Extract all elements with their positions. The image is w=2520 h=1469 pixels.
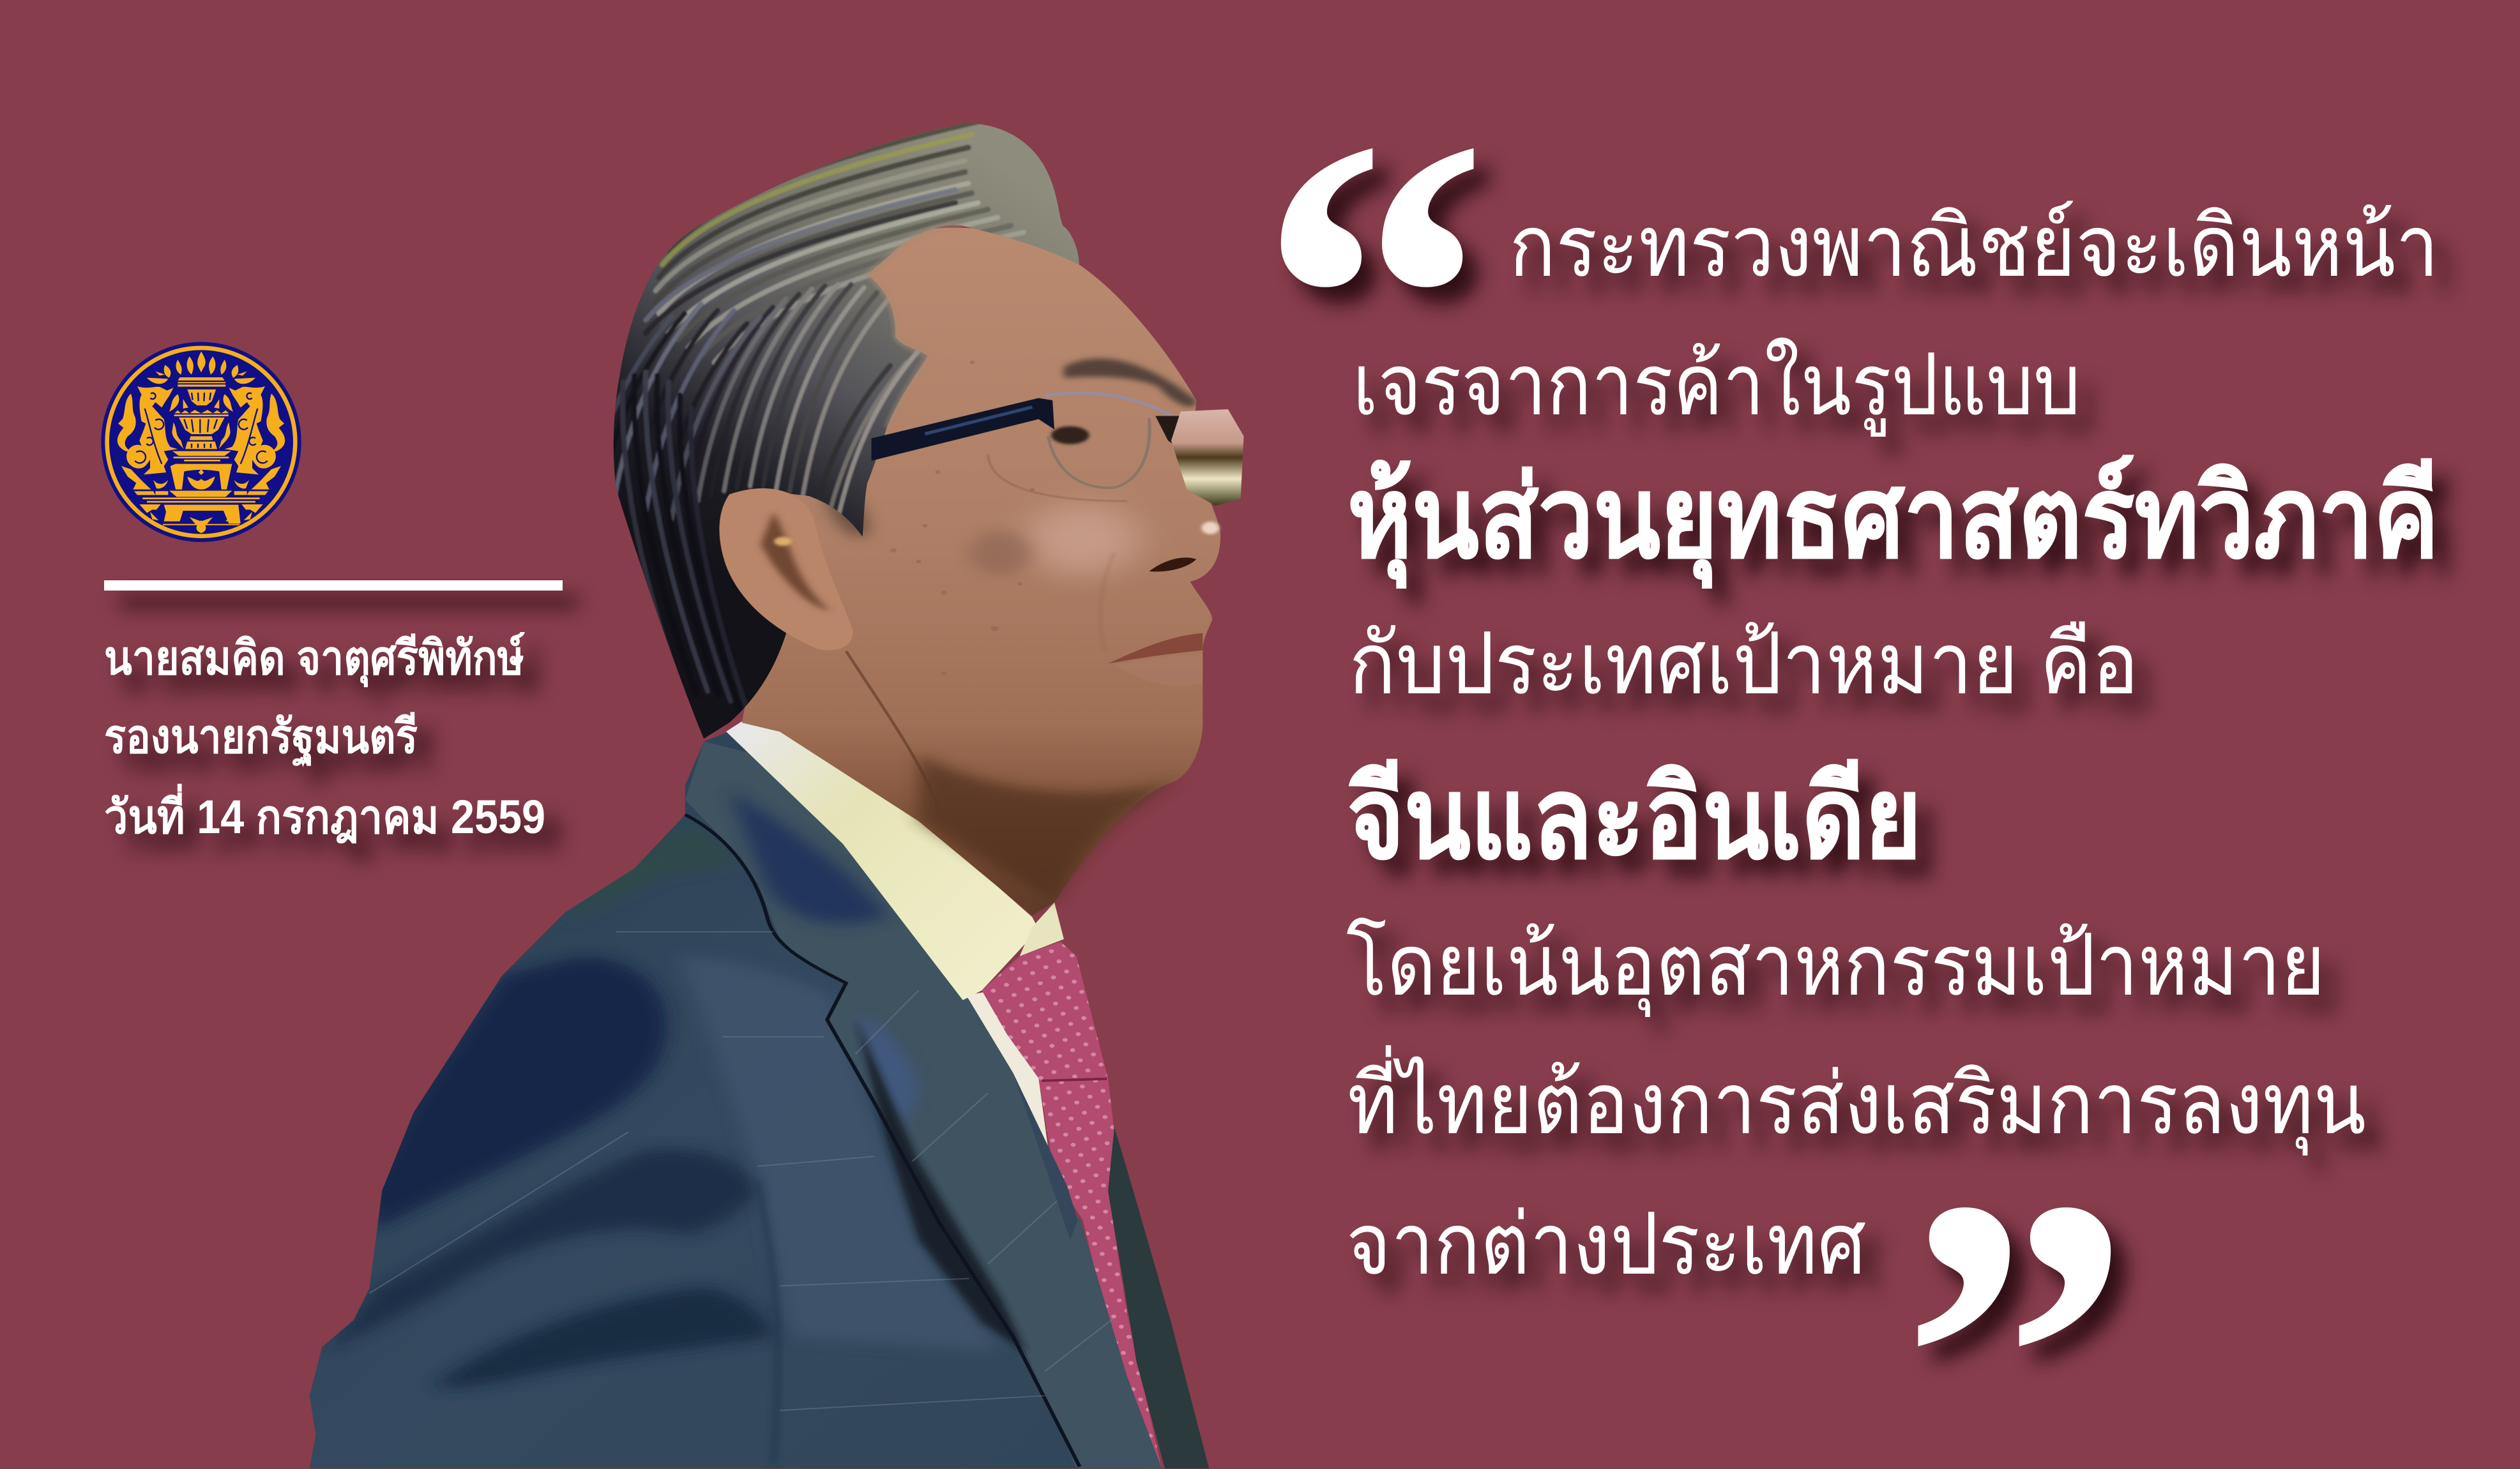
- opening quotation mark: “: [1259, 44, 1489, 554]
- emblem detailing: [135, 393, 268, 464]
- check pattern: [370, 932, 1114, 1410]
- base step: [134, 491, 155, 495]
- jacket and tie: [310, 719, 1209, 1468]
- skin speckles: [890, 361, 1035, 675]
- eye: [1051, 426, 1089, 444]
- lower ornament: [190, 517, 213, 525]
- shirt collar: [726, 719, 1038, 1000]
- shirt: [966, 990, 1067, 1200]
- ear and glasses: [719, 393, 1244, 650]
- date: วันที่ 14 กรกฎาคม 2559: [104, 783, 545, 843]
- lips: [1108, 633, 1203, 664]
- cheek shadow: [969, 530, 1032, 575]
- upper bowl: [187, 389, 216, 405]
- seal disc: [101, 342, 301, 542]
- soft hairline: [867, 225, 962, 428]
- glasses temple arm: [871, 398, 1054, 461]
- quote line 8: จากต่างประเทศ: [1346, 1197, 1866, 1292]
- top rim: [1045, 393, 1171, 416]
- quote line 7: ที่ไทยต้องการส่งเสริมการลงทุน: [1347, 1045, 2366, 1156]
- government seal: [101, 342, 301, 542]
- sleeve edge: [757, 1181, 778, 1464]
- bridge: [1155, 416, 1187, 454]
- middle bowl: [179, 418, 225, 434]
- lower table: [139, 504, 161, 513]
- nose highlight: [1201, 522, 1219, 534]
- jacket body: [310, 732, 1162, 1468]
- quote line 2: เจรจาการค้าในรูปแบบ: [1353, 338, 2081, 437]
- caption: speaker name and date: [104, 631, 545, 843]
- photo: man in profile: [310, 109, 1244, 1468]
- highlighted line: China and India: จีนและอินเดีย: [1347, 755, 1922, 882]
- quote line 1: กระทรวงพาณิชย์จะเดินหน้า: [1509, 199, 2439, 294]
- arm shadows: [363, 957, 667, 1230]
- head: [742, 228, 1220, 915]
- quote line 6: โดยเน้นอุตสาหกรรมเป้าหมาย: [1346, 917, 2325, 1017]
- quote block: [1259, 44, 2439, 1450]
- hair base: [614, 123, 1079, 739]
- flames: [147, 352, 255, 384]
- nostril: [1149, 557, 1196, 571]
- hair strands: [613, 123, 1027, 714]
- table ornament: [199, 469, 204, 475]
- jacket back panel: [1108, 1127, 1209, 1468]
- divider rule: [104, 580, 563, 591]
- speaker title: รองนายกรัฐมนตรี: [104, 710, 418, 767]
- quote line 4: กับประเทศเป้าหมาย คือ: [1349, 617, 2139, 712]
- lower bowl: [190, 436, 213, 440]
- glasses: [871, 393, 1244, 506]
- closing quotation mark: “: [1903, 941, 2133, 1450]
- hair: [584, 109, 1079, 739]
- lapel: [685, 741, 1162, 1468]
- tray: [172, 451, 231, 456]
- emblem: [118, 352, 268, 533]
- far lens: [1171, 409, 1244, 506]
- tie: [982, 942, 1162, 1468]
- jaw shadow: [918, 754, 1184, 902]
- lapel stitch line: [685, 815, 1080, 1466]
- lens rim: [1048, 418, 1150, 488]
- table: [171, 464, 232, 490]
- lens reflection arc: [988, 454, 1127, 501]
- lion right: [214, 386, 285, 490]
- top plate: [178, 377, 225, 380]
- wrinkle: [846, 651, 937, 808]
- sideburn shadow: [824, 490, 868, 537]
- gold ring: [107, 348, 295, 536]
- cheek highlight: [1026, 503, 1139, 575]
- ear: [719, 488, 853, 650]
- lion left: [118, 386, 188, 490]
- light chest panel: [679, 956, 1001, 1352]
- eyebrow: [1064, 359, 1196, 407]
- face and neck: [742, 228, 1220, 915]
- speaker name: นายสมคิด จาตุศรีพิทักษ์: [104, 631, 526, 688]
- middle bowl crown: [174, 410, 229, 413]
